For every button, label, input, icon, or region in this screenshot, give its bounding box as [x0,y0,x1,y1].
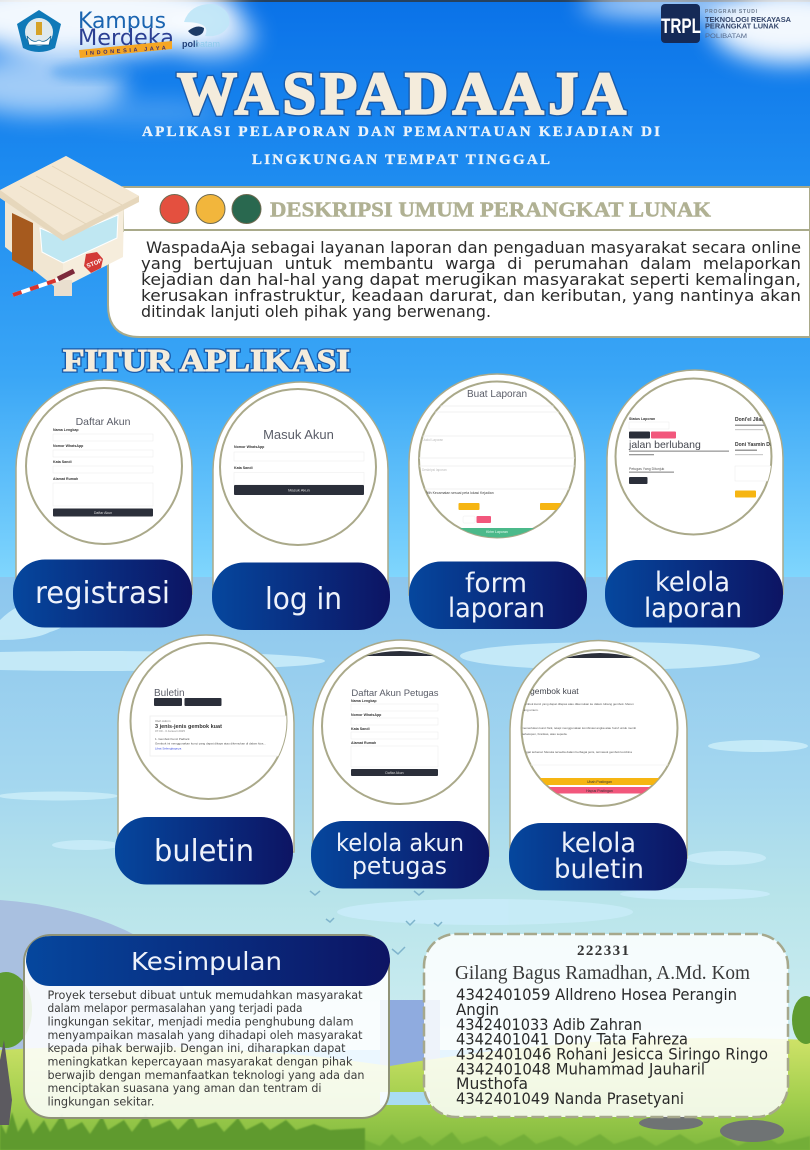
subtitle: LINGKUNGAN TEMPAT TINGGAL [252,152,550,168]
panel heading: DESKRIPSI UMUM PERANGKAT LUNAK [270,198,712,222]
screenshot: form: Kirim Laporan [486,530,508,534]
conclusion text: lingkungan sekitar, menjadi media penghubung dalam [48,1014,354,1028]
logo: TRPL program studi: TRPL [661,15,701,38]
card: buletin [115,635,295,884]
top bar fragment [566,653,634,658]
conclusion text: menciptakan suasana yang aman dan tentram di [48,1081,322,1095]
screenshot: buletin: Oleh Admin [155,719,171,723]
logo: TRPL program studi: TEKNOLOGI REKAYASA [705,17,791,24]
screenshot: kelola laporan: Doni Yasmin Dita [735,442,776,448]
label pill: buletin [154,834,254,869]
screenshot: buletin: 1. Gembok Kunci Padlock [155,737,190,741]
screenshot: daftar akun petugas [351,688,439,776]
logo: TRPL program studi: POLIBATAM [705,33,747,40]
member list: Musthofa [456,1074,528,1093]
screenshot: form: Deskripsi laporan [422,468,447,472]
screenshot: buletin: Buletin [154,688,185,699]
screenshot: masuk akun [234,427,364,495]
screenshot: daftar akun: Nomor WhatsApp [53,444,84,448]
screenshot: daftar akun: Daftar Akun [94,511,112,515]
logo: TRPL program studi: PROGRAM STUDI [705,9,758,15]
screenshot: kelola buletin: yang umum. [522,708,539,712]
conclusion text: berwajib dengan memanfaatkan teknologi yang ada dan [48,1068,364,1082]
screenshot: kelola buletin: memerlukan kunci fisik, tetapi menggunakan kombinasi angka atau huruf untuk memb [522,726,637,730]
label pill [212,562,390,630]
header band: Kesimpulan [131,947,282,976]
conclusion text: meningkatkan kepercayaan masyarakat dengan pihak [48,1054,353,1068]
description text: ditindak lanjuti oleh pihak yang berwenang. [141,302,491,321]
screenshot: form: Judul Laporan [423,438,443,442]
icon: flock of birds [310,891,442,954]
label pill: laporan [448,593,545,624]
screenshot title: buat laporan: Buat Laporan [467,389,527,400]
panel: tim pengembang [424,934,788,1117]
heading: fitur aplikasi: FITUR APLIKASI [63,342,350,378]
member list: 4342401059 Alldreno Hosea Perangin [456,985,737,1004]
screenshot: daftar akun: Kata Sandi [53,460,72,464]
card: registrasi [13,380,192,628]
supervisor name: Gilang Bagus Ramadhan, A.Md. Kom [455,962,750,984]
screenshot: kelola laporan: Petugas Yang Ditunjuk [629,467,665,471]
panel: deskripsi umum perangkat lunak [108,187,810,337]
screenshot: kelola buletin: sangat terkenal. Mereka tersedia dalam berbagai jenis, termasuk gembok kombina [522,750,632,754]
description text: WaspadaAja sebagai layanan laporan dan pengaduan masyarakat secara online [146,238,801,257]
logo: Kampus Merdeka: Kampus [78,9,166,34]
screenshot: kelola laporan [628,417,776,498]
screenshot: masuk akun: Nomor WhatsApp [234,445,265,449]
subtitle: APLIKASI PELAPORAN DAN PEMANTAUAN KEJADIAN DI [142,124,660,140]
screenshot: masuk akun: Masuk Akun [263,427,334,442]
screenshot: kelola laporan: Status Laporan [629,417,655,421]
member list: 4342401049 Nanda Prasetyani [456,1089,684,1108]
conclusion text: kepada pihak berwajib. Dengan ini, diharapkan dapat [48,1041,346,1055]
screenshot: daftar akun petugas: Nomor WhatsApp [351,713,382,717]
member list: 4342401041 Dony Tata Fahreza [456,1030,688,1048]
screenshot: kelola buletin: Ubah Postingan [587,780,612,784]
label pill: kelola akun [336,829,464,857]
logo: TRPL program studi: PERANGKAT LUNAK [705,24,779,30]
screenshot: kelola buletin: gembok kuat [530,686,579,696]
logo: Tut Wuri Handayani [17,10,61,52]
description text [141,238,801,321]
header band [26,936,390,986]
label pill: registrasi [35,576,170,611]
top bar fragment [366,651,434,656]
screenshot: buletin: Gembok ini menggunakan kunci yang dapat dikaps atau dikemukan di dalam kios... [155,742,266,746]
screenshot: masuk akun: Masuk Akun [288,488,310,492]
conclusion text: lingkungan sekitar. [48,1094,154,1108]
screenshot: kelola buletin: Hapus Postingan [586,789,613,793]
screenshot: kelola laporan: Doni'el Jilabi [735,417,766,423]
card: kelola akun petugas [311,640,489,888]
label pill [13,560,192,628]
card: form laporan [409,374,587,629]
screenshot: buletin: 3 jenis-jenis gembok kuat [155,724,222,730]
icon: security booth with barrier: STOP [86,258,103,270]
screenshot: buletin [150,688,295,756]
member list: 4342401033 Adib Zahran [456,1015,642,1034]
logo: Polibatam: poli [182,39,198,49]
title: WASPADAAJA [177,60,626,126]
screenshot: daftar akun petugas: Kata Sandi [351,727,370,731]
logo: Polibatam [182,4,229,49]
conclusion text: dalam melapor permasalahan yang terjadi pada [48,1001,302,1015]
icon: security booth with barrier [0,156,139,296]
subtitle [142,124,660,168]
card: kelola laporan [605,370,783,628]
conclusion text [48,988,364,1108]
screenshot: form [419,406,575,538]
screenshot: daftar akun petugas: Alamat Rumah [351,741,376,745]
screenshot: masuk akun: Kata Sandi [234,466,253,470]
label pill: laporan [644,593,742,624]
label pill: form [465,568,527,599]
label pill: petugas [352,852,447,880]
member list: Angin [456,1000,499,1019]
card: log in [212,382,390,630]
logo: Kampus Merdeka: INDONESIA JAYA [86,45,166,57]
member list: 4342401046 Rohani Jesicca Siringo Ringo [456,1044,768,1064]
card: kelola buletin [509,641,687,890]
label pill: kelola [655,567,730,598]
screenshot: daftar akun petugas: Daftar Akun [385,771,404,775]
screenshot: kelola buletin: Gembok kunci yang dapat dilepas atau dikemukan ke dalam lubang gembok. Meren [522,702,634,706]
description text: kerusakan infrastruktur, keadaan darurat, dan keributan, yang nantinya akan [141,286,801,305]
logo: Kampus Merdeka: Merdeka [78,26,174,51]
logo: Polibatam: batam [195,39,220,49]
title fill: WASPADAAJA [177,60,626,126]
screenshot: daftar akun petugas: Nama Lengkap [351,699,377,703]
heading fill: FITUR APLIKASI [63,342,350,378]
screenshot: daftar akun: Alamat Rumah [53,477,78,481]
member list [456,985,768,1108]
label pill [115,817,293,884]
label pill [605,560,783,628]
conclusion text: menyampaikan masalah yang dihadapi oleh masyarakat [48,1028,363,1042]
traffic lights [160,194,261,224]
conclusion text: Proyek tersebut dibuat untuk memudahkan masyarakat [48,988,363,1002]
screenshot: buletin: Lihat Selengkapnya [155,746,182,750]
class code: 222331 [577,943,629,959]
screenshot: kelola laporan: jalan berlubang [628,439,701,451]
screenshot: buletin: 07:00 - 3 Januari 2025 [155,729,185,733]
description text: kejadian dan hal-hal yang dapat merugikan masyarakat seperti kemalingan, [141,270,801,289]
logo: Kampus Merdeka [78,9,174,58]
label pill: buletin [554,854,644,885]
logo: TRPL program studi [661,4,791,43]
screenshot: kelola buletin: terkelopen, brankas, atau sepeda. [522,732,568,736]
screenshot: form: Pilih Kecamatan sesuai peta lokasi Kejadian [425,491,494,495]
screenshot: daftar akun: Nama Lengkap [53,428,79,432]
label pill [311,821,489,888]
label pill: log in [265,582,342,617]
label pill: kelola [561,828,636,859]
description text: yang bertujuan untuk membantu warga di perumahan dalam melaporkan [141,254,801,273]
member list: 4342401048 Muhammad Jauharil [456,1060,705,1078]
screenshot: daftar akun: Daftar Akun [76,416,131,428]
label pill [509,823,687,890]
screenshot: daftar akun petugas: Daftar Akun Petugas [351,688,439,699]
screenshot: daftar akun [53,416,153,516]
panel: kesimpulan [24,935,390,1118]
label pill [409,562,587,629]
screenshot: kelola buletin [522,686,678,794]
